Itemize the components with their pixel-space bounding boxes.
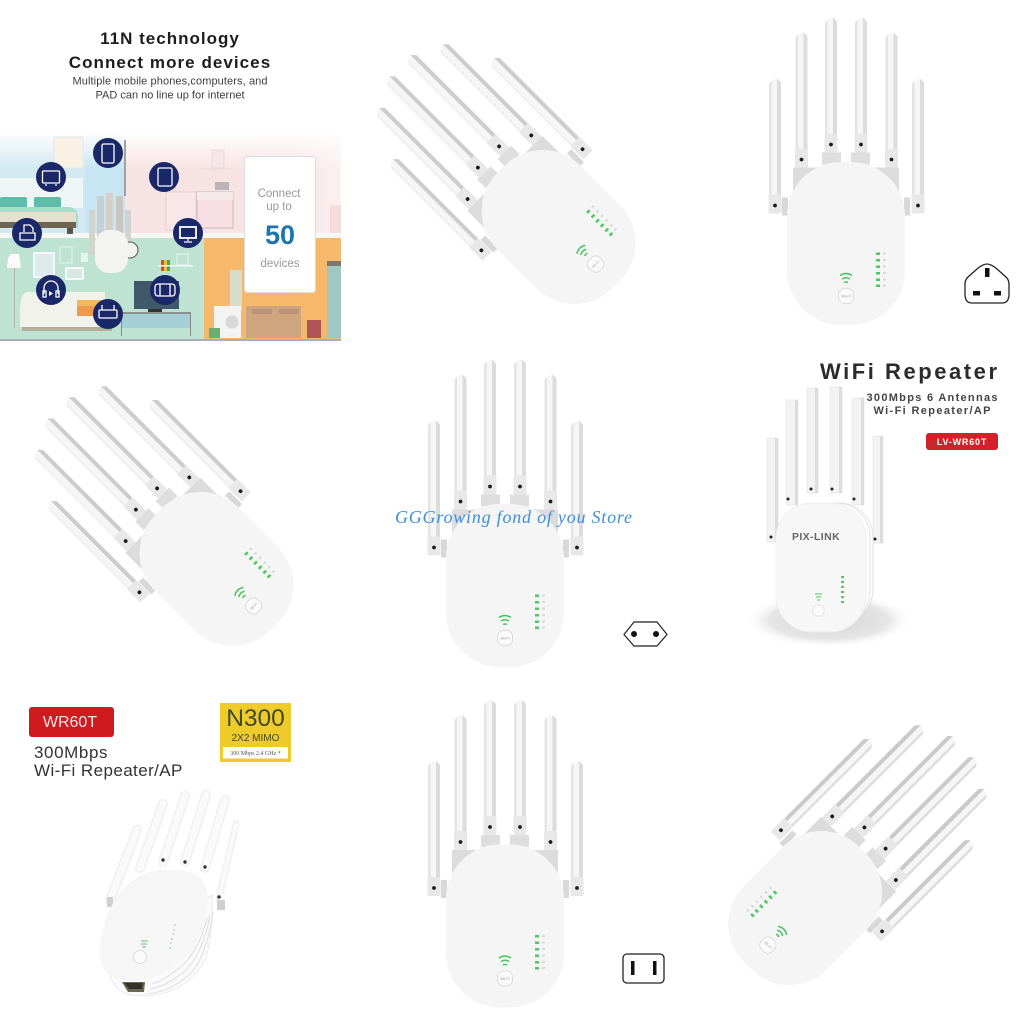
device: upright repeater centre — [428, 360, 584, 667]
subtitle text: Multiple mobile phones,computers, and — [72, 76, 268, 88]
device: rotated repeater bottom right — [692, 693, 1020, 1020]
device: rotated repeater top centre: Wi-Fi — [591, 259, 601, 269]
icon: headphones — [36, 275, 66, 305]
subheading — [866, 392, 998, 417]
device: upright repeater top right — [768, 18, 924, 325]
title: 11N technology: 11N technology — [100, 29, 240, 48]
subtitle text — [72, 76, 268, 102]
icon: television — [36, 162, 66, 192]
subheading: Wi-Fi Repeater/AP — [874, 405, 990, 417]
shadow — [744, 592, 914, 648]
device: upright repeater centre: Wi-Fi — [500, 636, 510, 640]
device: angled repeater with Ethernet port — [100, 795, 236, 996]
badge: N300 2X2 MIMO: 300 Mbps 2.4 GHz * — [230, 751, 281, 757]
antennas — [767, 387, 883, 543]
device body: PIX-LINK — [792, 531, 840, 543]
card: Connect up to 50 devices: devices — [260, 258, 300, 270]
badge: N300 2X2 MIMO: N300 — [226, 705, 285, 732]
watermark: GGGrowing fond of you Store — [395, 507, 632, 527]
device: rotated repeater top centre — [344, 12, 672, 339]
card: Connect up to 50 devices: up to — [266, 201, 292, 213]
card: Connect up to 50 devices: Connect — [258, 188, 301, 200]
card: Connect up to 50 devices — [244, 156, 316, 292]
top face — [100, 870, 208, 981]
device: upright repeater bottom centre: Wi-Fi — [500, 976, 510, 981]
title: 11N technology — [69, 29, 271, 72]
panel: 11N technology room illustration — [0, 29, 341, 341]
text: 300Mbps Wi-Fi Repeater/AP — [34, 743, 183, 780]
badge: N300 2X2 MIMO — [220, 703, 291, 762]
icon: game console — [150, 275, 180, 305]
controls — [169, 924, 176, 949]
device: rotated repeater bottom right: Wi-Fi — [763, 940, 773, 950]
icon: tablet — [149, 162, 179, 192]
text: 300Mbps Wi-Fi Repeater/AP: 300Mbps — [34, 743, 108, 762]
antennas — [110, 795, 236, 900]
badge: WR60T — [29, 707, 114, 737]
side shells — [108, 895, 212, 996]
title: 11N technology: Connect more devices — [69, 53, 271, 72]
text: 300Mbps Wi-Fi Repeater/AP: Wi-Fi Repeater/AP — [34, 761, 183, 780]
device: upright repeater top right: Wi-Fi — [841, 294, 851, 298]
room scene — [0, 130, 341, 341]
heading: WiFi Repeater: WiFi Repeater — [820, 359, 997, 384]
badge: WR60T: WR60T — [43, 714, 97, 731]
port — [122, 982, 145, 992]
device: rotated repeater middle left — [2, 354, 330, 681]
subheading: 300Mbps 6 Antennas — [866, 392, 998, 404]
icon: monitor — [173, 218, 203, 248]
icon: printer — [12, 218, 42, 248]
device body — [776, 503, 873, 632]
badge: LV-WR60T — [926, 433, 998, 450]
icon: router — [93, 299, 123, 329]
panel: WiFi Repeater LV-WR60T — [744, 359, 998, 648]
icon: smartphone — [93, 138, 123, 168]
badge: LV-WR60T: LV-WR60T — [937, 437, 987, 447]
icon: UK plug — [965, 264, 1009, 303]
device: rotated repeater middle left: Wi-Fi — [249, 601, 259, 611]
device: upright repeater bottom centre — [428, 700, 584, 1008]
icon: EU plug — [624, 622, 667, 646]
subtitle text: PAD can no line up for internet — [96, 90, 244, 102]
card: Connect up to 50 devices: 50 — [265, 220, 295, 250]
badge: N300 2X2 MIMO: 2X2 MIMO — [232, 733, 280, 744]
icon: US plug — [623, 954, 664, 983]
mini repeater in room — [89, 140, 138, 273]
